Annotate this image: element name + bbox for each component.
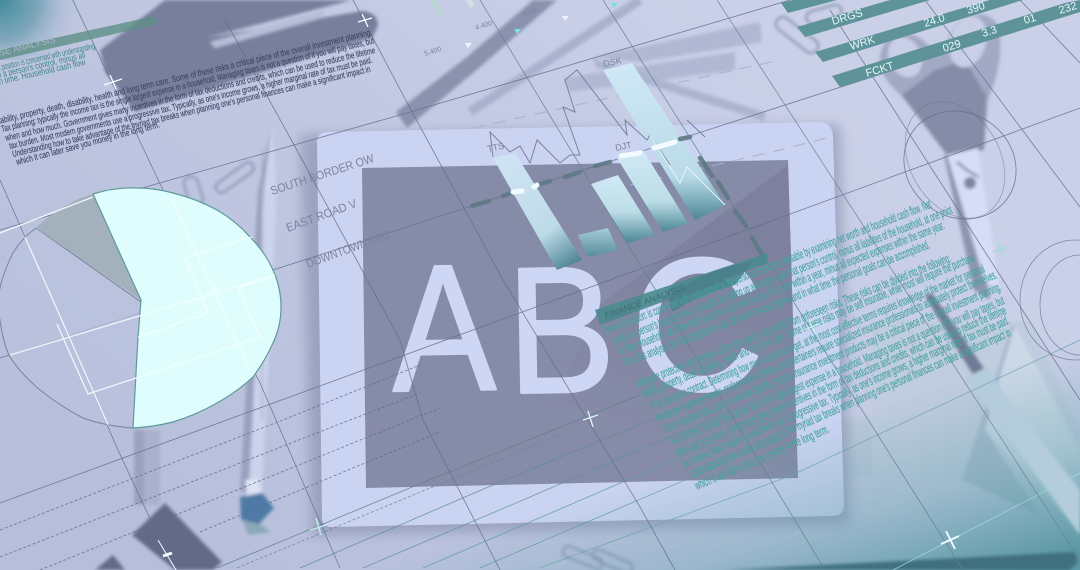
heading bar: right	[595, 253, 768, 325]
bar labels	[486, 55, 633, 154]
top-left teal corner	[0, 0, 110, 60]
data table: top right: 24.0	[922, 12, 946, 30]
road labels: EAST ROAD V	[284, 196, 359, 235]
text block: upper left: Understanding how to take advantage of the myriad tax breaks when planning one's personal finances can make a significant impact in	[11, 64, 371, 159]
pie slice: pale cyan	[93, 188, 281, 428]
tablet letters: ABC: A	[390, 226, 497, 430]
data table: top right: 029	[941, 38, 962, 55]
data table: top right	[781, 0, 1080, 87]
pen	[725, 293, 1080, 570]
text block: upper left: when and how much. Government gives many incentives in the form of tax deductions and credits, which can be used to reduce the lifetime	[3, 45, 376, 143]
pencil	[240, 122, 272, 495]
panel: tablet	[300, 122, 850, 535]
trend zigzag	[490, 70, 725, 205]
bar 5	[603, 63, 725, 220]
tablet screen	[362, 160, 798, 488]
tablet letters: ABC	[390, 218, 765, 432]
text block: right: which it can later save you money in the long term.	[692, 422, 831, 493]
data table: top right: WRK	[848, 34, 877, 53]
data table: top right: DRGS	[830, 7, 864, 28]
road labels: SOUTH BORDER OW	[269, 151, 376, 198]
text block: right	[595, 197, 1013, 493]
bar 2	[578, 228, 618, 257]
bar labels: DJT	[614, 140, 633, 153]
road labels: DOWNTOWN ARC	[304, 227, 392, 271]
text block: upper left: tax burden. Most modern governments use a progressive tax. Typically, as one's income grows, a higher marginal rate of tax must be paid.	[8, 55, 373, 151]
data table: top right: 01	[1022, 12, 1038, 27]
data table: top right: 3.3	[980, 24, 999, 40]
screen shaded wedge	[520, 165, 798, 484]
ticker strip: 4.400	[475, 20, 493, 32]
tablet letters: ABC: B	[505, 229, 617, 432]
pie outline and slice	[0, 228, 141, 428]
scissors	[880, 12, 1000, 300]
ticker strip: 5.400	[424, 46, 442, 58]
tablet letters: ABC: C	[629, 218, 765, 432]
pie chart	[0, 188, 281, 428]
bar labels: TTS	[486, 141, 505, 154]
heading bar: upper left	[0, 16, 158, 60]
bar 4	[617, 150, 688, 232]
bar labels: DSK	[602, 55, 623, 69]
text block: upper left: d position is concerned with understanding	[0, 41, 96, 73]
pie slice: grey-green	[36, 194, 141, 300]
text block: upper left	[0, 16, 376, 167]
data table: top right: FCKT	[864, 60, 896, 80]
ticker strip	[424, 0, 618, 58]
bar 3	[591, 175, 655, 243]
heading bar: right: FINANCE ANALYSIS	[603, 282, 686, 321]
text block: upper left: which it can later save you money in the long term.	[14, 119, 161, 167]
bar chart	[472, 55, 763, 270]
data table: top right: 390	[965, 0, 986, 17]
road labels	[269, 151, 392, 271]
trend dashes	[472, 137, 763, 256]
notepad	[872, 320, 1080, 510]
ticker strip: 4.50	[523, 7, 538, 18]
bar 1	[493, 153, 582, 270]
data table: top right: 232	[1057, 0, 1078, 17]
